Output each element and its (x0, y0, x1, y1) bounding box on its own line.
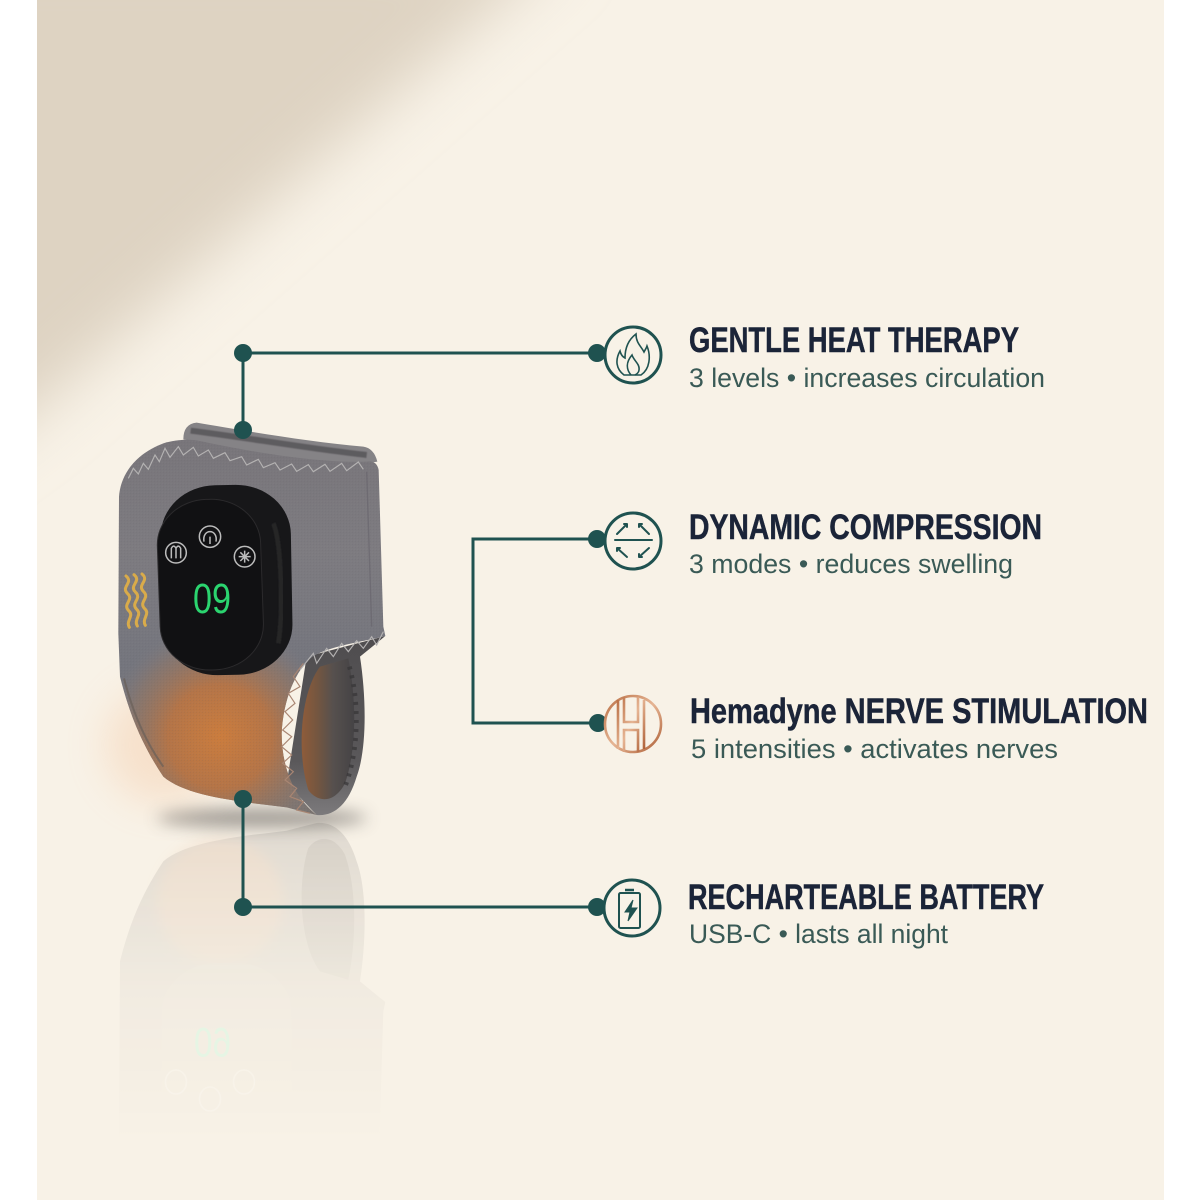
product: knee massager wrap (118, 423, 385, 815)
feature: nerve stimulation (690, 692, 1148, 764)
product reflection (120, 823, 364, 1057)
heat zone (118, 627, 317, 815)
yellow heat waves (125, 574, 147, 627)
connector: battery (234, 790, 606, 916)
loop strap (287, 636, 385, 815)
feature: gentle heat therapy: 3 levels • increases circulation (689, 363, 1045, 393)
lower seam (124, 678, 163, 767)
heat glow (105, 687, 225, 803)
feature: dynamic compression: DYNAMIC COMPRESSION (689, 508, 1042, 547)
feature: dynamic compression (689, 508, 1042, 579)
reflected display number: 09 (194, 1019, 231, 1066)
icon: battery (604, 880, 660, 936)
connector: compression and nerve stimulation (473, 530, 607, 732)
control icons (166, 526, 255, 567)
control module housing (160, 484, 293, 676)
feature: rechargeable battery (688, 878, 1044, 949)
wrap body (118, 440, 385, 815)
control module face (156, 498, 265, 672)
icon: flame (605, 327, 661, 383)
feature: rechargeable battery: USB-C • lasts all night (689, 919, 948, 949)
feature: gentle heat therapy (689, 321, 1045, 393)
feature: nerve stimulation: 5 intensities • activates nerves (691, 734, 1058, 764)
fabric texture (118, 440, 385, 815)
icon: Hemadyne H logo (605, 696, 661, 752)
inner stitching (345, 667, 356, 787)
feature: dynamic compression: 3 modes • reduces swelling (689, 549, 1013, 579)
display number: 09 (193, 575, 231, 623)
stitching (128, 447, 383, 813)
loop interior (302, 658, 354, 799)
feature: gentle heat therapy: GENTLE HEAT THERAPY (689, 321, 1019, 360)
reflected control icons (166, 1070, 254, 1111)
connector: heat therapy (234, 344, 606, 439)
icon: compression arrows (605, 513, 661, 569)
floor shadow (157, 808, 367, 828)
back strap (183, 423, 377, 463)
feature: rechargeable battery: RECHARTEABLE BATTERY (688, 878, 1044, 917)
